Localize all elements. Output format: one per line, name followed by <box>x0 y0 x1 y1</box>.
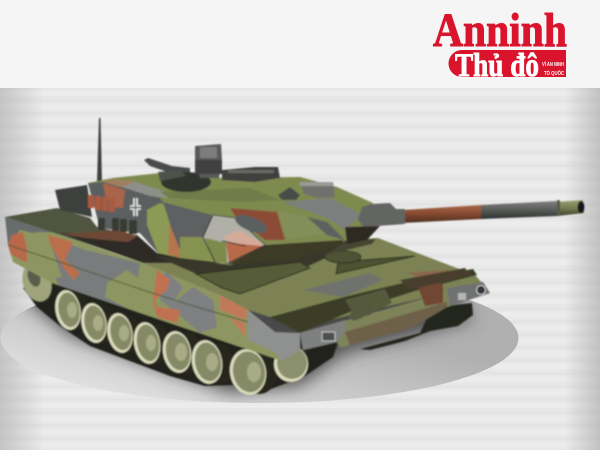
commander sight <box>195 144 222 178</box>
road wheel 6 <box>188 338 233 386</box>
turret <box>88 173 373 264</box>
hull front deck <box>143 238 483 327</box>
deck engine hatch <box>336 256 415 274</box>
mantlet shadow <box>345 226 380 244</box>
smoke launchers dark <box>98 218 137 234</box>
deck left hatch panel <box>196 262 310 294</box>
road wheel 1 <box>52 288 88 332</box>
hull emblem right <box>476 286 486 294</box>
tank <box>5 118 584 398</box>
hull front plate <box>270 268 490 350</box>
turret rust patch rear <box>103 183 125 208</box>
logo: An ninh Thủ đô: TỔ QUỐC <box>544 70 564 77</box>
hull rear deck <box>5 208 157 263</box>
ground shadow ellipse <box>0 298 518 403</box>
running gear: track <box>18 259 473 394</box>
turret roof tan <box>103 179 135 187</box>
front plate grey strip <box>300 320 345 350</box>
wedge armour <box>203 215 265 263</box>
turret grey roof plate <box>283 198 362 230</box>
road wheel 2 <box>78 301 114 345</box>
road wheel 8 <box>274 346 308 382</box>
front plate right grey <box>447 282 490 306</box>
commander cupola and machine gun <box>144 144 362 230</box>
skirt tail plate <box>248 310 300 361</box>
rear stowage basket <box>55 185 92 217</box>
turret dark grey cheek <box>307 217 345 240</box>
rear idler wheel <box>18 259 56 305</box>
turret wedge underside <box>228 240 343 264</box>
gun barrel muzzle section <box>557 200 584 216</box>
front plate tool rack <box>270 268 477 333</box>
logo word: An ninh: Anninh <box>433 4 567 57</box>
turret dark grey patch <box>233 211 269 237</box>
deck dark band under turret <box>155 240 352 285</box>
gun barrel grey section <box>481 201 557 219</box>
road wheel 5 <box>160 329 201 375</box>
hull side with camouflage <box>5 217 300 361</box>
turret green cheek <box>278 211 327 240</box>
front plate brown lower <box>345 302 447 345</box>
turret grey flank <box>88 182 172 253</box>
side camouflage: grey patches <box>4 217 52 244</box>
logo word: Thủ đô: Thủ đô <box>455 48 539 84</box>
turret grey panel <box>163 202 212 250</box>
gun mantlet <box>358 203 405 227</box>
deck grey patch <box>303 273 383 297</box>
rear roof plate <box>222 167 280 182</box>
gunner sight box <box>300 182 335 198</box>
machine gun <box>144 158 190 174</box>
antenna <box>97 118 102 183</box>
road wheel 4 <box>131 320 169 366</box>
loader hatch <box>161 172 211 192</box>
side skirt seam <box>8 245 275 332</box>
road wheel 7 <box>226 346 277 398</box>
iron cross marking <box>130 198 141 216</box>
logo band <box>448 50 566 77</box>
logo: An ninh Thủ đô <box>433 4 567 84</box>
hull marking left <box>322 332 335 341</box>
turret roof pale grey <box>122 182 168 198</box>
turret green blob <box>147 203 180 258</box>
smoke launchers rust <box>88 195 115 212</box>
turret orange stripe <box>168 222 180 258</box>
side camouflage: rust patches <box>8 232 27 263</box>
logo slogan: VÌ AN NINH <box>542 60 564 68</box>
deck rust patch <box>407 270 473 283</box>
turret roof band <box>160 188 280 202</box>
gun barrel brown section <box>402 205 481 223</box>
front track and sprocket <box>360 303 473 350</box>
turret rust cheek <box>230 208 285 240</box>
road wheels <box>52 288 308 398</box>
hull marking right <box>458 293 466 300</box>
rear deck dark engine area <box>60 233 235 282</box>
turret green lower <box>180 237 214 262</box>
turret body <box>88 173 373 263</box>
main gun <box>345 200 584 244</box>
road wheel 3 <box>104 311 140 355</box>
